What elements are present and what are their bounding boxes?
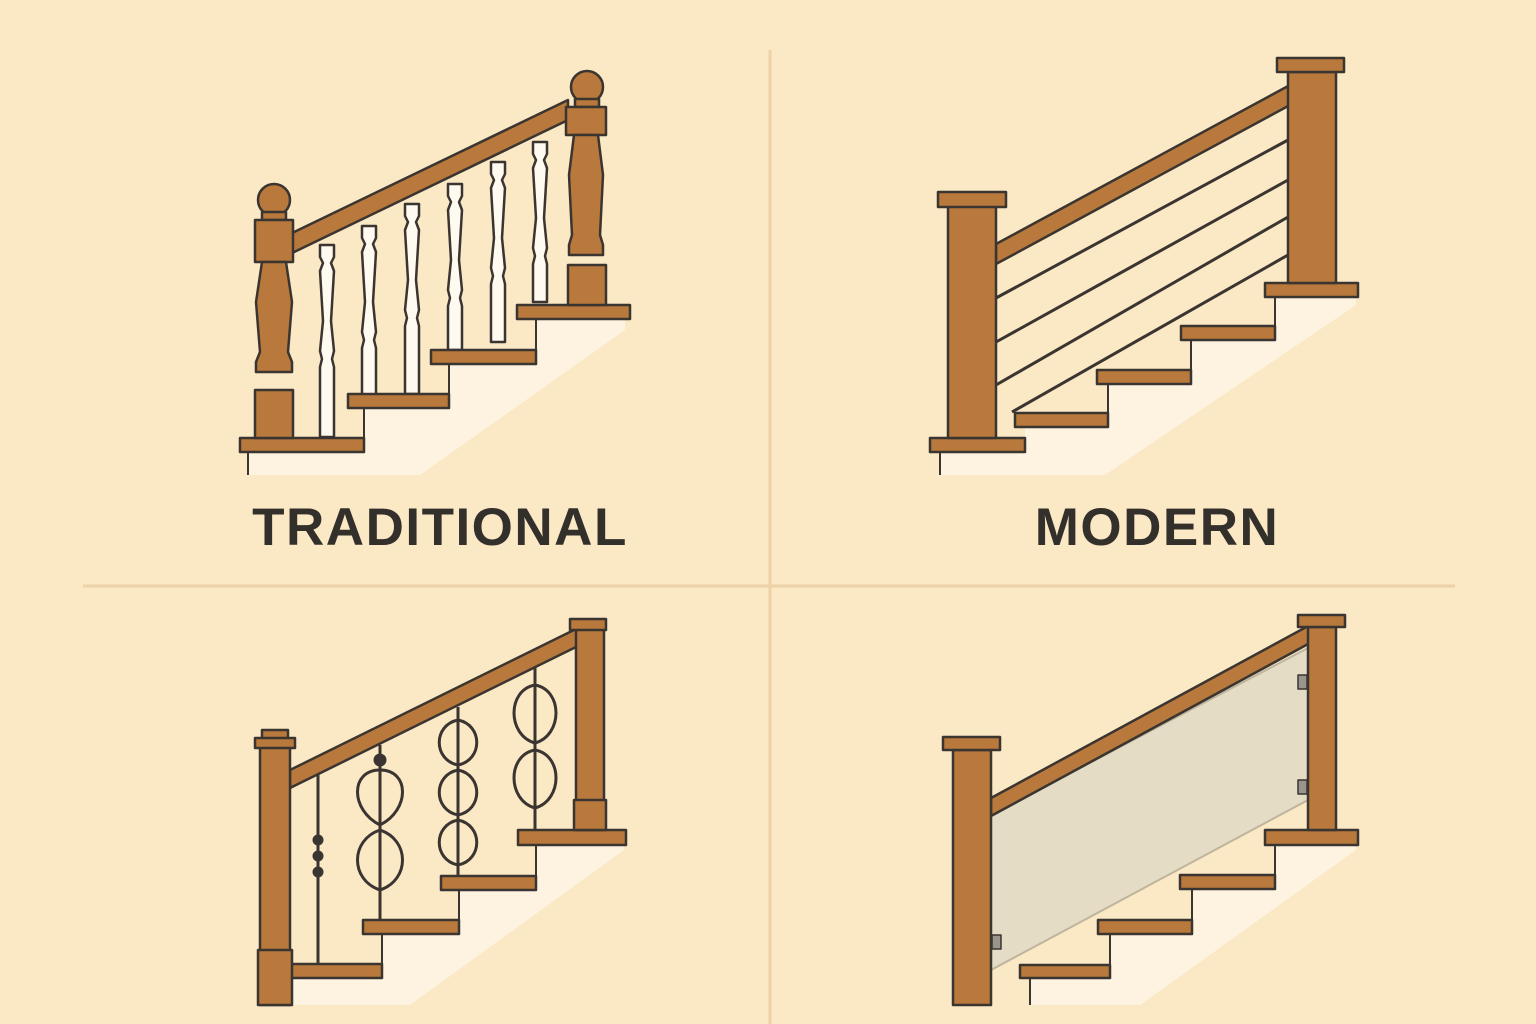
glass panel xyxy=(991,648,1308,970)
treads xyxy=(1020,830,1358,978)
risers xyxy=(940,297,1275,475)
risers xyxy=(382,845,536,964)
stair body xyxy=(248,319,625,475)
handrail xyxy=(996,85,1290,264)
cables xyxy=(996,140,1288,412)
handrail xyxy=(290,628,578,788)
treads xyxy=(930,283,1358,452)
panel: wrought iron railing xyxy=(255,619,626,1005)
handrail xyxy=(290,100,568,254)
posts xyxy=(943,615,1345,1005)
risers xyxy=(1030,845,1275,1005)
treads xyxy=(282,830,626,978)
stair body xyxy=(290,845,624,1005)
heading: modern: MODERN xyxy=(1035,498,1279,557)
posts xyxy=(255,619,606,1005)
left newel xyxy=(255,184,293,438)
panel: glass railing xyxy=(943,615,1358,1005)
handrail xyxy=(991,625,1310,816)
right newel xyxy=(566,71,606,305)
stair body xyxy=(1030,845,1356,1005)
balusters xyxy=(320,142,547,437)
heading: traditional: TRADITIONAL xyxy=(252,498,628,557)
panel: modern railing xyxy=(930,58,1358,475)
glass clips xyxy=(992,675,1307,949)
risers xyxy=(248,319,536,475)
posts xyxy=(938,58,1344,438)
iron balusters xyxy=(314,665,556,964)
treads xyxy=(240,305,630,452)
stair body xyxy=(940,297,1356,475)
panel: traditional railing xyxy=(240,71,630,475)
